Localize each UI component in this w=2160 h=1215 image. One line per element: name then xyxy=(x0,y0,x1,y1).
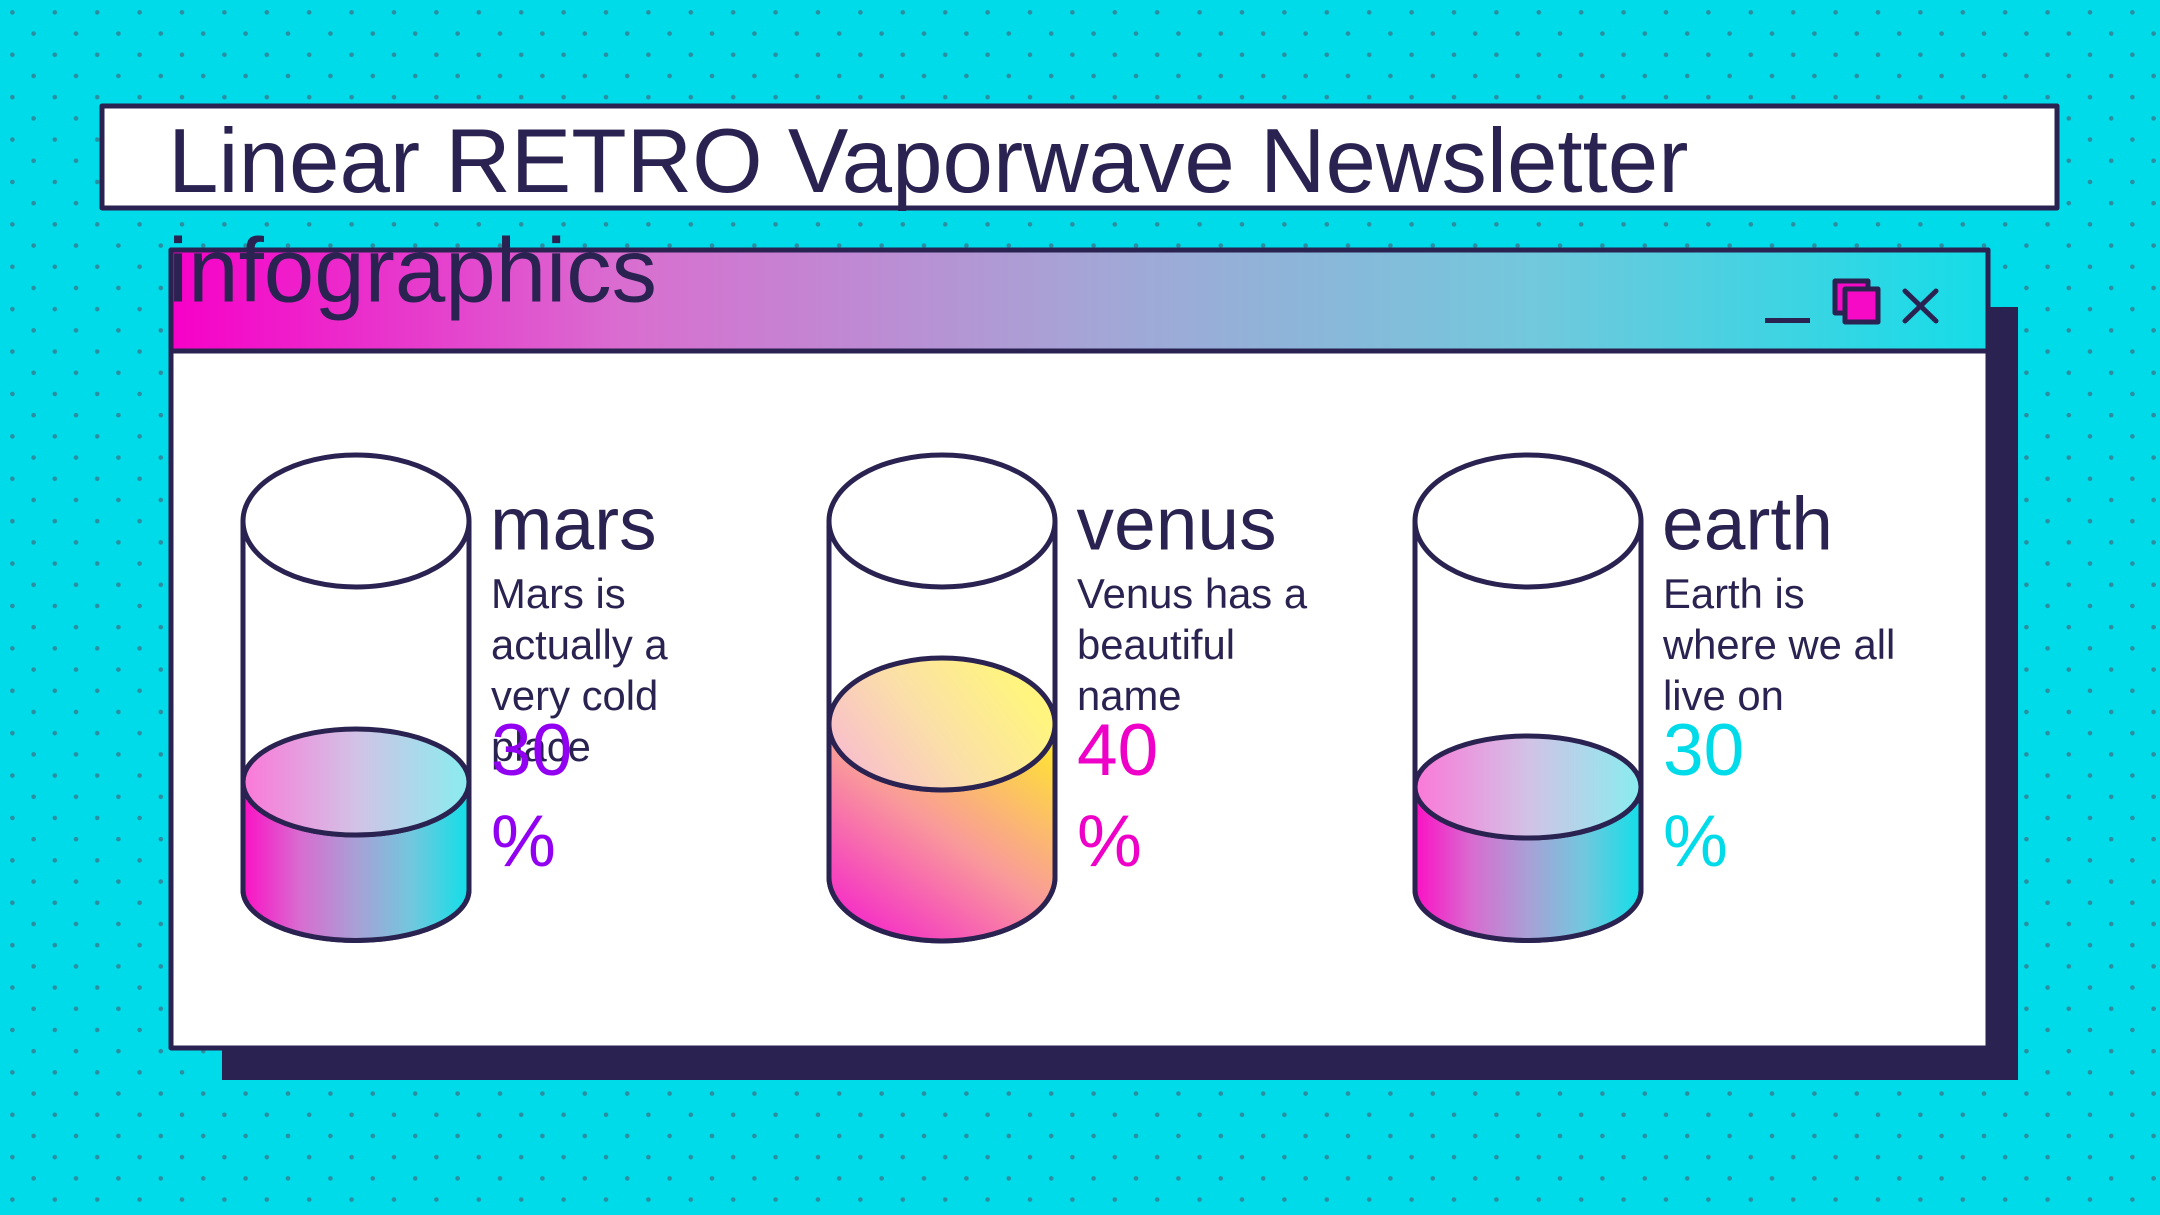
earth value: 30 xyxy=(1663,710,1744,791)
mars heading: mars xyxy=(490,482,657,566)
icon: close xyxy=(1905,291,1936,321)
window shadow xyxy=(222,307,2018,1080)
window panel xyxy=(171,250,2018,1080)
earth description: live on xyxy=(1663,672,1784,719)
mars description: Mars is xyxy=(491,570,626,617)
earth value: % xyxy=(1663,801,1728,882)
mars cylinder xyxy=(243,455,469,940)
window body xyxy=(171,250,1988,1048)
venus value: 40 xyxy=(1077,710,1158,791)
icon: minimize xyxy=(1765,318,1810,323)
mars description: place xyxy=(491,723,591,770)
venus description: beautiful xyxy=(1077,621,1235,668)
venus column xyxy=(829,455,1308,941)
mars description: very cold xyxy=(491,672,658,719)
venus value: % xyxy=(1077,801,1142,882)
earth description: where we all xyxy=(1662,621,1895,668)
mars description: actually a xyxy=(491,621,668,668)
venus cylinder xyxy=(829,455,1055,941)
venus description: Venus has a xyxy=(1077,570,1308,617)
earth description: Earth is xyxy=(1663,570,1805,617)
mars value: % xyxy=(491,801,556,882)
icon: restore xyxy=(1835,281,1878,322)
earth column xyxy=(1415,455,1895,940)
venus description: name xyxy=(1077,672,1182,719)
earth heading: earth xyxy=(1662,482,1833,566)
title box xyxy=(102,106,2057,208)
title: infographics xyxy=(168,220,657,322)
window title bar xyxy=(171,250,1988,351)
mars value: 30 xyxy=(491,710,572,791)
title: Linear RETRO Vaporwave Newsletter xyxy=(168,111,1688,212)
mars column xyxy=(243,455,668,940)
earth cylinder xyxy=(1415,455,1641,940)
venus heading: venus xyxy=(1076,482,1277,566)
